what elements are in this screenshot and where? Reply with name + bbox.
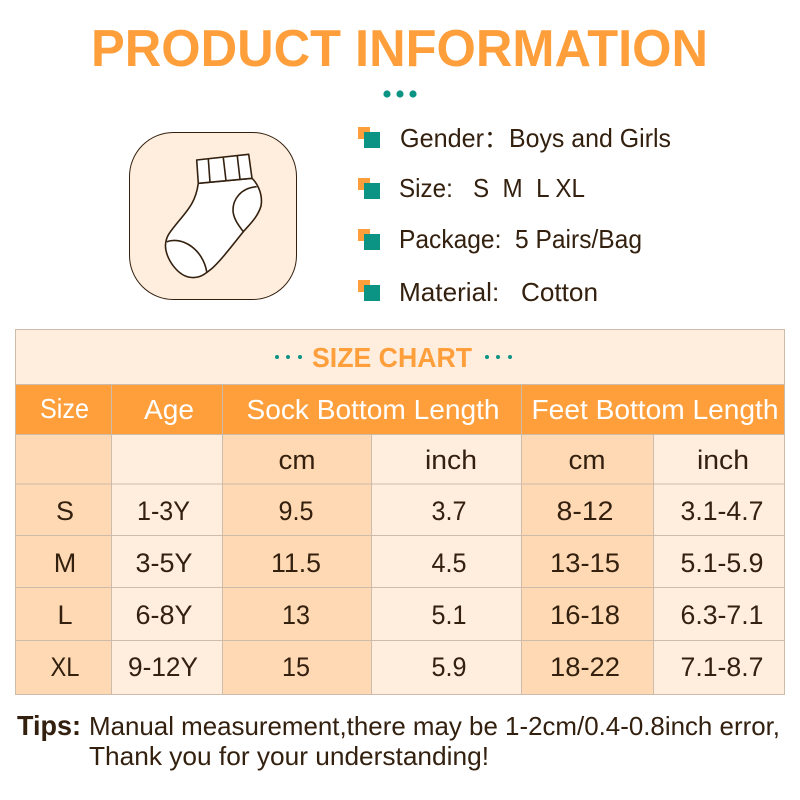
row XL: 18-22	[550, 652, 620, 682]
row XL: 9-12Y	[128, 652, 198, 682]
header row: Age	[144, 394, 194, 425]
unit row: inch	[425, 445, 477, 475]
row M: 4.5	[432, 548, 466, 578]
text: size: Size: S M L XL	[399, 173, 585, 203]
text: gender: Boys and Girls	[509, 123, 671, 153]
unit row	[278, 445, 749, 475]
row S: 9.5	[278, 496, 314, 526]
chart heading: SIZE CHART	[312, 342, 472, 373]
header row: Sock Bottom Length	[246, 394, 500, 425]
bullet: material	[358, 280, 380, 301]
row S: 3.1-4.7	[680, 496, 764, 526]
table backgrounds	[15, 329, 785, 695]
row M: 11.5	[271, 548, 321, 578]
row M: 13-15	[550, 548, 620, 578]
size chart table	[15, 329, 785, 695]
tips: Tips:	[17, 710, 81, 741]
row XL: 7.1-8.7	[680, 652, 764, 682]
row XL: 15	[282, 652, 310, 682]
bullet: gender	[358, 127, 380, 148]
header row: Feet Bottom Length	[532, 394, 778, 425]
row L: 16-18	[550, 600, 620, 630]
header row	[40, 393, 778, 425]
unit row: inch	[697, 445, 749, 475]
row S: 3.7	[432, 496, 466, 526]
row S: S	[56, 496, 74, 526]
text: package: Package: 5 Pairs/Bag	[399, 224, 642, 254]
text: gender: Gender	[400, 123, 484, 153]
unit row: cm	[278, 445, 316, 475]
row S: 1-3Y	[137, 496, 190, 526]
text: gender	[400, 119, 671, 154]
row L: L	[57, 600, 73, 630]
row XL: XL	[50, 652, 80, 682]
row S: 8-12	[556, 496, 614, 526]
tips: Manual measurement,there may be 1-2cm/0.4-0.8inch error,	[89, 711, 780, 741]
info list	[358, 119, 671, 307]
row XL: 5.9	[432, 652, 466, 682]
tips	[17, 710, 780, 771]
icon: sock	[130, 132, 296, 300]
bullet: package	[358, 229, 380, 250]
header row: Size	[40, 393, 89, 424]
row L	[57, 600, 764, 630]
row L: 13	[282, 600, 310, 630]
row L: 5.1	[432, 600, 466, 630]
text: material: Material: Cotton	[399, 277, 598, 307]
row XL	[50, 652, 764, 682]
tips: Thank you for your understanding!	[89, 741, 489, 771]
bullet: size	[358, 178, 380, 199]
row M	[54, 548, 764, 578]
row M: 3-5Y	[136, 548, 192, 578]
unit row: cm	[568, 445, 606, 475]
row M: M	[54, 548, 76, 578]
row S	[56, 496, 764, 526]
row M: 5.1-5.9	[680, 548, 764, 578]
row L: 6.3-7.1	[680, 600, 764, 630]
row L: 6-8Y	[136, 600, 192, 630]
text: gender: ：	[484, 119, 508, 154]
title dots	[383, 90, 417, 98]
title: PRODUCT INFORMATION	[91, 20, 708, 78]
